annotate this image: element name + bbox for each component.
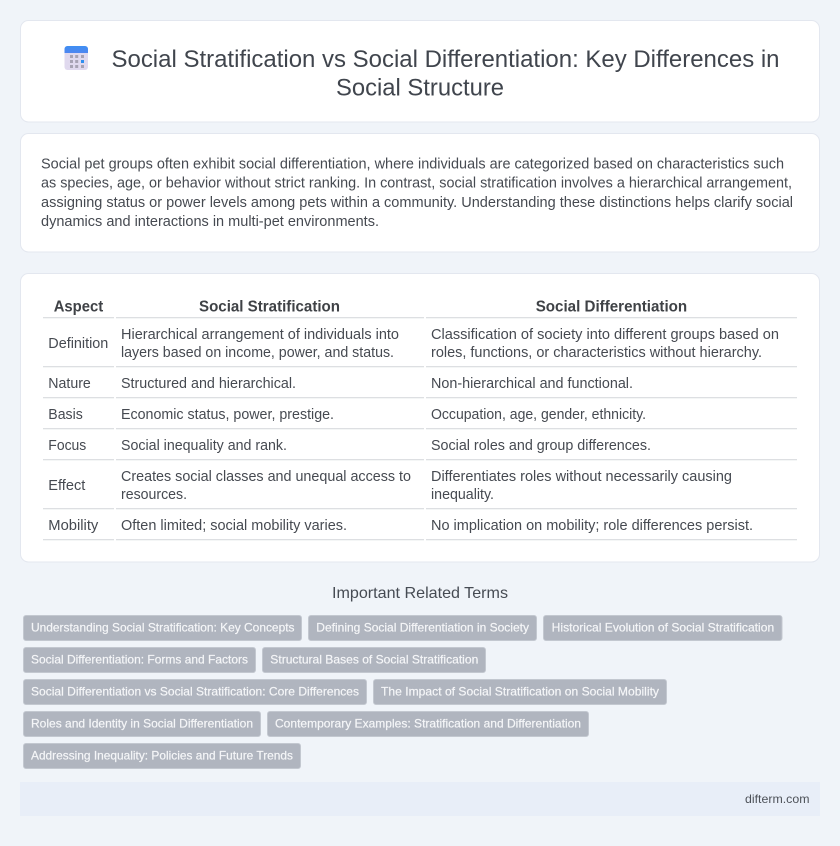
row: definition [48, 327, 779, 361]
tag [24, 616, 302, 640]
row: definition: layers based on income, power, and status. [121, 345, 394, 361]
row: definition: Hierarchical arrangement of individuals into [121, 327, 399, 343]
related term tags [24, 616, 782, 768]
title: Social Stratification vs Social Differentiation: Key Differences in [112, 46, 780, 73]
intro paragraph [41, 156, 793, 230]
intro paragraph: as species, age, or behavior without strict ranking. In contrast, social stratification involves a hierarchical arrangement, [41, 175, 792, 191]
row: mobility [48, 518, 753, 534]
tag: Defining Social Differentiation in Society [316, 621, 529, 635]
row: mobility: No implication on mobility; role differences persist. [431, 518, 753, 534]
tag [268, 712, 588, 736]
table header row: Aspect [54, 299, 104, 316]
tag: The Impact of Social Stratification on Social Mobility [381, 685, 659, 699]
icon: calendar [64, 46, 88, 70]
table header row: Social Differentiation [536, 299, 687, 316]
row: basis: Occupation, age, gender, ethnicity. [431, 407, 646, 423]
row: basis: Economic status, power, prestige. [121, 407, 334, 423]
row: effect [48, 469, 732, 503]
row: focus: Social inequality and rank. [121, 438, 287, 454]
tag: Understanding Social Stratification: Key Concepts [31, 621, 294, 635]
table header row: Social Stratification [199, 299, 340, 316]
intro paragraph: Social pet groups often exhibit social differentiation, where individuals are categorized based on characteristics such [41, 156, 784, 172]
row: effect: Effect [48, 478, 85, 494]
footer site name: difterm.com [745, 792, 810, 806]
row: definition: Definition [48, 336, 108, 352]
tag [24, 712, 260, 736]
panel: comparison table [20, 274, 820, 562]
tag [24, 648, 256, 672]
tag [262, 648, 486, 672]
row: mobility: Mobility [48, 518, 99, 534]
footer [20, 782, 820, 816]
tag [308, 616, 536, 640]
tag [24, 680, 366, 704]
row: basis [48, 407, 646, 423]
row: effect: Differentiates roles without necessarily causing [431, 469, 732, 485]
row: basis: Basis [48, 407, 83, 423]
tag [374, 680, 666, 704]
tag: Social Differentiation: Forms and Factors [31, 653, 248, 667]
table header row [54, 299, 687, 316]
row: definition: roles, functions, or characteristics without hierarchy. [431, 345, 762, 361]
heading: important related terms: Important Related Terms [332, 585, 508, 602]
tag: Roles and Identity in Social Differentiation [31, 717, 253, 731]
panel: introduction [20, 134, 820, 252]
tag [544, 616, 782, 640]
tag: Addressing Inequality: Policies and Future Trends [31, 749, 293, 763]
tag: Structural Bases of Social Stratification [270, 653, 478, 667]
tag: Social Differentiation vs Social Stratification: Core Differences [31, 685, 359, 699]
row: nature [48, 376, 633, 392]
row: focus [48, 438, 651, 454]
header panel [20, 20, 820, 122]
title [112, 46, 780, 102]
row: effect: inequality. [431, 487, 494, 503]
row: nature: Non-hierarchical and functional. [431, 376, 633, 392]
row: focus: Focus [48, 438, 86, 454]
tag: Historical Evolution of Social Stratification [552, 621, 774, 635]
row: mobility: Often limited; social mobility varies. [121, 518, 347, 534]
row: nature: Nature [48, 376, 91, 392]
title: Social Structure [336, 74, 504, 102]
tag [24, 744, 300, 768]
row: effect: resources. [121, 487, 187, 503]
row: definition: Classification of society into different groups based on [431, 327, 779, 343]
row: focus: Social roles and group differences. [431, 438, 651, 454]
tag: Contemporary Examples: Stratification and Differentiation [275, 717, 581, 731]
row: effect: Creates social classes and unequal access to [121, 469, 411, 485]
intro paragraph: assigning status or power levels among pets within a community. Understanding these distinctions helps clarify social [41, 195, 793, 211]
row: nature: Structured and hierarchical. [121, 376, 296, 392]
intro paragraph: dynamics and interactions in multi-pet environments. [41, 214, 379, 230]
